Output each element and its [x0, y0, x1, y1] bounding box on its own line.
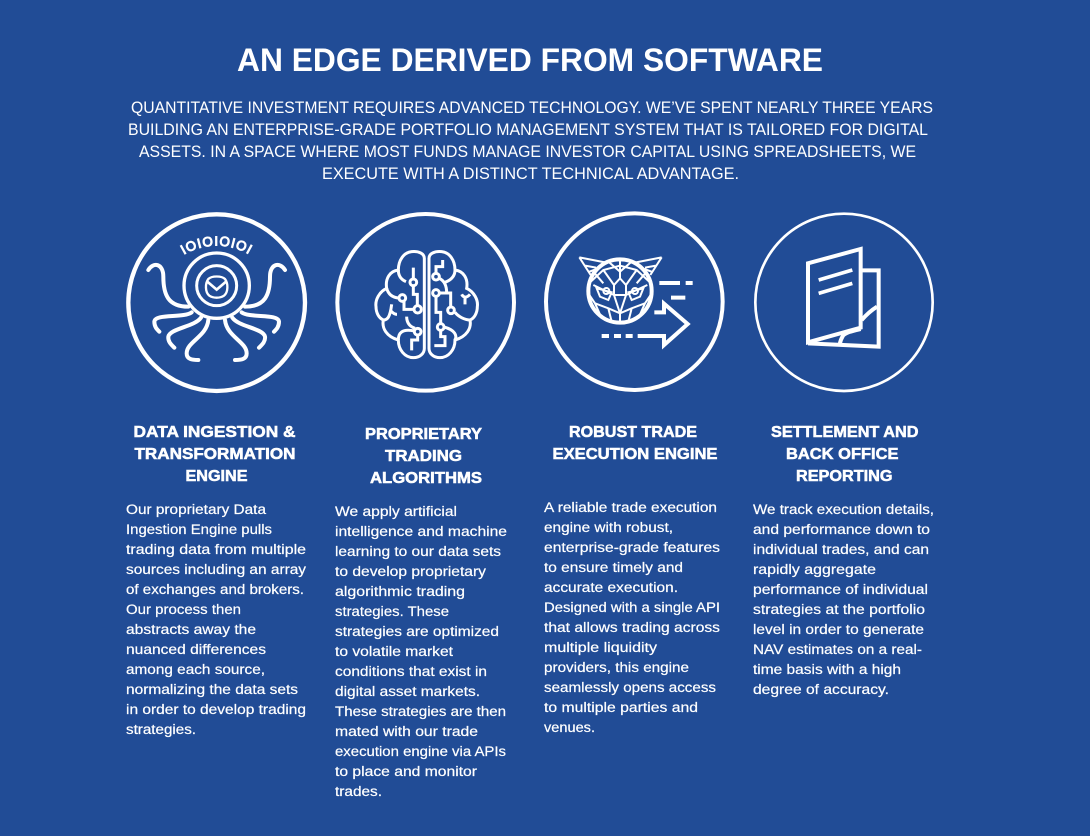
body text: trading algorithms: execution engine via APIs [335, 744, 506, 760]
heading: settlement reporting: REPORTING [796, 468, 892, 485]
heading: settlement reporting [771, 424, 918, 485]
body text: trading algorithms: digital asset markets. [335, 684, 480, 700]
body text: settlement reporting [753, 502, 934, 698]
body text: trade execution: engine with robust, [544, 520, 673, 536]
body text: data ingestion [126, 502, 307, 738]
icon: folded document [755, 214, 933, 391]
body text: trade execution: accurate execution. [544, 580, 678, 596]
body text: trading algorithms: algorithmic trading [335, 584, 465, 600]
body text: settlement reporting: and performance down to [753, 522, 930, 538]
body text: trading algorithms: to volatile market [335, 644, 453, 660]
heading: settlement reporting: SETTLEMENT AND [771, 424, 918, 441]
body text: trading algorithms: strategies are optimized [335, 624, 499, 640]
body text: settlement reporting: degree of accuracy. [753, 682, 889, 698]
intro paragraph: QUANTITATIVE INVESTMENT REQUIRES ADVANCED TECHNOLOGY. WE’VE SPENT NEARLY THREE YEARS [131, 99, 933, 117]
heading: data ingestion: TRANSFORMATION [134, 446, 296, 463]
body text: trading algorithms: strategies. These [335, 604, 449, 620]
body text: trading algorithms: to develop proprietary [335, 564, 487, 580]
panel: data ingestion [126, 212, 308, 738]
intro paragraph: EXECUTE WITH A DISTINCT TECHNICAL ADVANTAGE. [322, 165, 739, 183]
body text: trading algorithms: learning to our data sets [335, 544, 501, 560]
body text: settlement reporting: level in order to generate [753, 622, 924, 638]
body text: data ingestion: nuanced differences [126, 642, 266, 658]
body text: trading algorithms [335, 504, 507, 800]
body text: trading algorithms: We apply artificial [335, 504, 457, 520]
body text: settlement reporting: performance of individual [753, 582, 928, 598]
body text: trade execution: seamlessly opens access [544, 680, 716, 696]
body text: trade execution: venues. [544, 720, 595, 736]
heading: trade execution: EXECUTION ENGINE [552, 446, 718, 463]
body text: trading algorithms: mated with our trade [335, 724, 478, 740]
body text: trade execution: Designed with a single API [544, 600, 720, 616]
body text: data ingestion: sources including an array [126, 562, 307, 578]
heading: trade execution: ROBUST TRADE [569, 424, 697, 441]
body text: settlement reporting: strategies at the portfolio [753, 602, 925, 618]
title: AN EDGE DERIVED FROM SOFTWARE [237, 42, 823, 78]
body text: trade execution: that allows trading across [544, 620, 720, 636]
body text: settlement reporting: NAV estimates on a real- [753, 642, 922, 658]
body text: data ingestion: among each source, [126, 662, 265, 678]
heading: trading algorithms [365, 426, 482, 487]
body text: settlement reporting: individual trades, and can [753, 542, 929, 558]
intro paragraph [128, 99, 933, 183]
heading: data ingestion: DATA INGESTION & [134, 424, 296, 441]
heading: trading algorithms: ALGORITHMS [370, 470, 482, 487]
icon: circuit brain [337, 214, 514, 391]
body text: data ingestion: trading data from multiple [126, 542, 306, 558]
heading: data ingestion: ENGINE [186, 468, 248, 485]
body text: trading algorithms: These strategies are then [335, 704, 506, 720]
panel: trade execution [544, 213, 723, 736]
panel: settlement reporting [753, 214, 934, 698]
body text: trade execution: to multiple parties and [544, 700, 698, 716]
body text: trade execution: to ensure timely and [544, 560, 683, 576]
body text: data ingestion: in order to develop trading [126, 702, 306, 718]
heading: trade execution [552, 424, 718, 463]
heading: settlement reporting: BACK OFFICE [786, 446, 899, 463]
body text: settlement reporting: We track execution details, [753, 502, 934, 518]
body text: data ingestion: abstracts away the [126, 622, 256, 638]
icon: owl with speed arrow [546, 213, 723, 390]
body text: trade execution: enterprise-grade features [544, 540, 720, 556]
body text: settlement reporting: time basis with a high [753, 662, 901, 678]
body text: trade execution: providers, this engine [544, 660, 689, 676]
body text: trade execution: multiple liquidity [544, 640, 658, 656]
body text: trading algorithms: trades. [335, 784, 382, 800]
heading: data ingestion [134, 424, 296, 485]
body text: data ingestion: Our process then [126, 602, 241, 618]
heading: trading algorithms: PROPRIETARY [365, 426, 482, 443]
body text: data ingestion: normalizing the data sets [126, 682, 298, 698]
panel: trading algorithms [335, 214, 514, 800]
body text: data ingestion: Our proprietary Data [126, 502, 266, 518]
body text: trading algorithms: conditions that exist in [335, 664, 487, 680]
body text: data ingestion: of exchanges and brokers. [126, 582, 304, 598]
heading: trading algorithms: TRADING [385, 448, 462, 465]
icon: data octopus [126, 212, 308, 394]
intro paragraph: ASSETS. IN A SPACE WHERE MOST FUNDS MANAGE INVESTOR CAPITAL USING SPREADSHEETS, WE [139, 143, 916, 161]
body text: data ingestion: strategies. [126, 722, 196, 738]
body text: data ingestion: Ingestion Engine pulls [126, 522, 272, 538]
body text: trading algorithms: intelligence and machine [335, 524, 507, 540]
icon: data octopus: IOIOIOIOI [180, 236, 253, 255]
intro paragraph: BUILDING AN ENTERPRISE-GRADE PORTFOLIO MANAGEMENT SYSTEM THAT IS TAILORED FOR DIGITAL [128, 121, 928, 139]
body text: trade execution: A reliable trade execution [544, 500, 717, 516]
body text: trade execution [544, 500, 720, 736]
body text: settlement reporting: rapidly aggregate [753, 562, 876, 578]
body text: trading algorithms: to place and monitor [335, 764, 477, 780]
